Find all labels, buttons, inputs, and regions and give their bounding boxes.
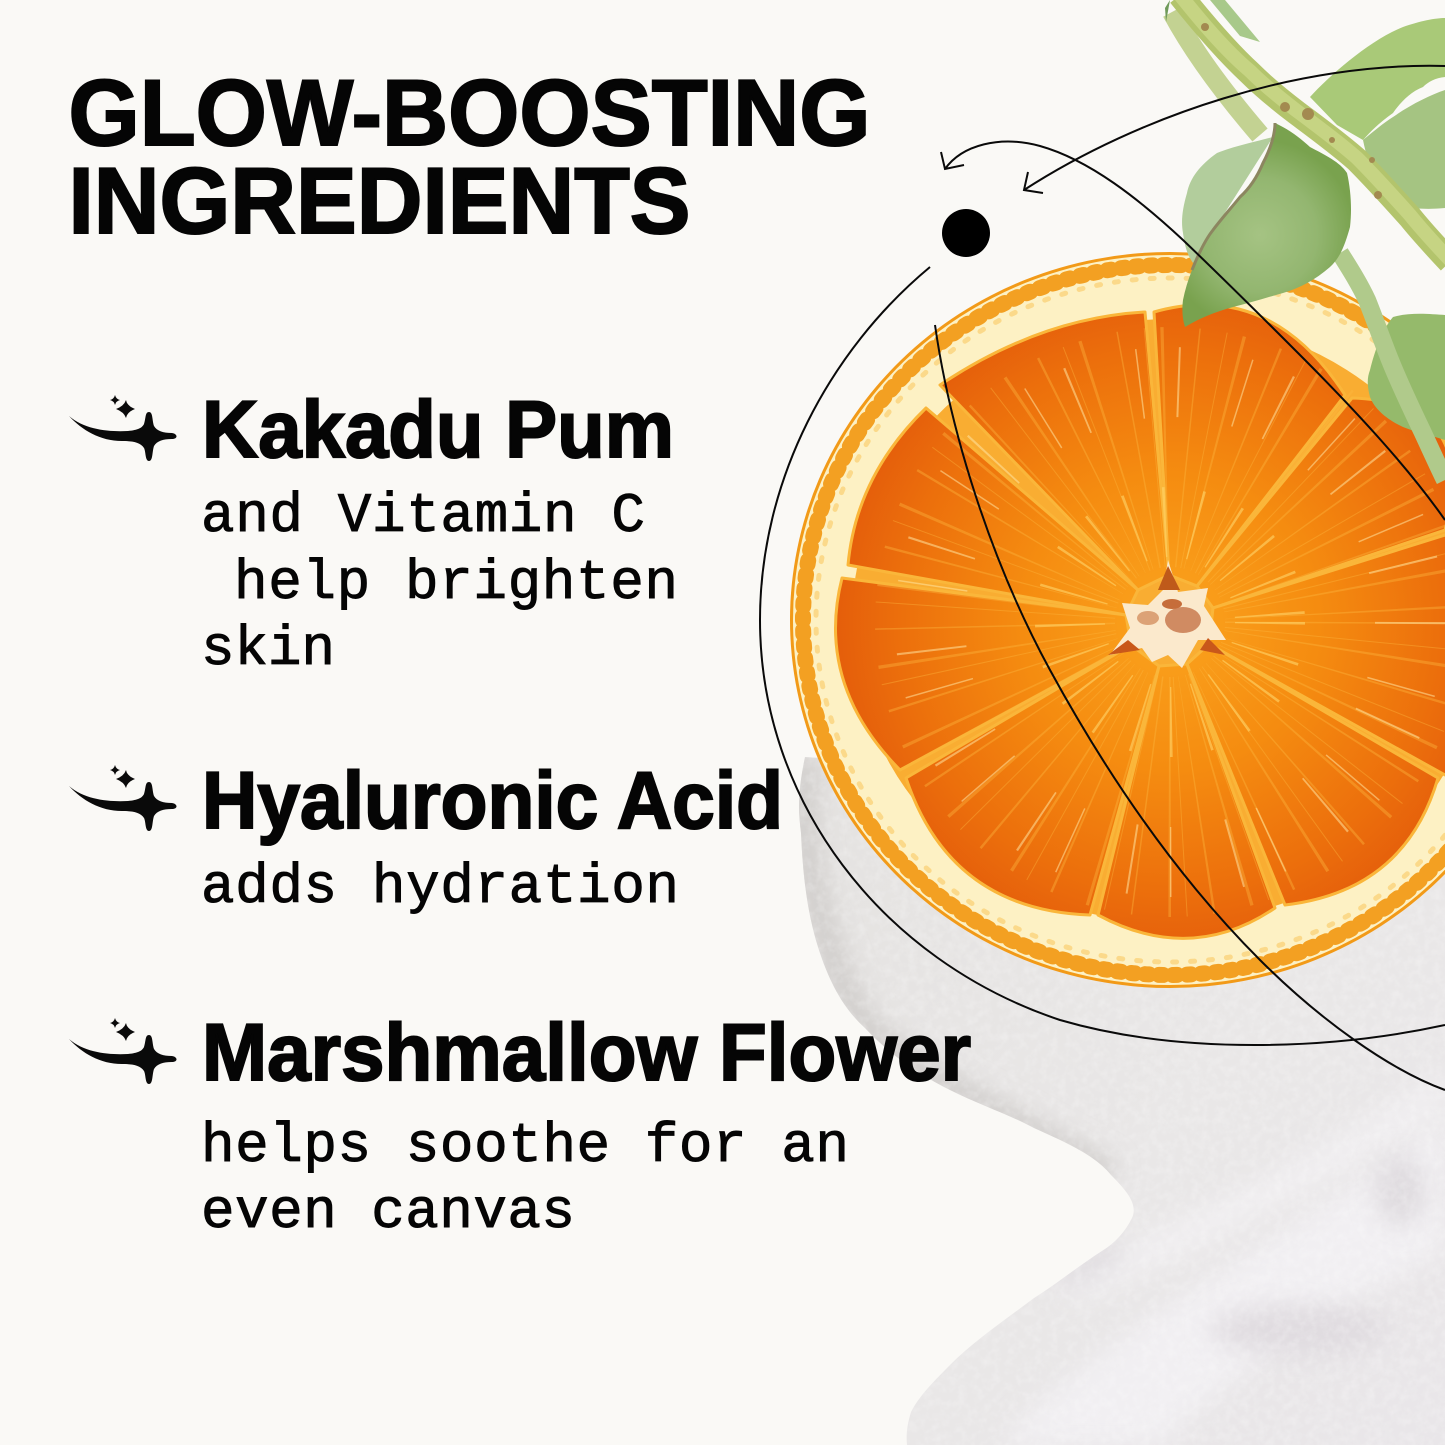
main stem [1180,0,1445,262]
right pod [1363,90,1445,209]
ingredient description: and Vitamin C [201,484,645,548]
orbit arrow to dot from above [941,142,1445,520]
ingredient name: Kakadu Pum [202,385,674,475]
pith shading [816,278,1445,962]
ingredient: Marshmallow Flower [69,1008,971,1244]
icon: sparkle star [69,395,176,461]
ingredient: Kakadu Plum [69,385,678,681]
ingredient description [201,484,678,681]
orbit circle line [760,267,1445,1045]
icon: sparkle star [69,1018,176,1084]
top right leaf [1310,18,1445,140]
lower stem [1340,253,1445,480]
orange segments [835,305,1445,938]
ingredient name: Hyaluronic Acid [202,756,783,846]
ingredient description: even canvas [201,1180,575,1244]
title: GLOW-BOOSTING [68,60,870,165]
stem highlight [1180,0,1445,260]
green plant sprig [1165,0,1445,480]
orange slice [790,252,1445,988]
black dot [942,209,990,257]
orbit descending line [935,325,1445,1090]
ingredient description: help brighten [234,551,678,615]
ingredient: Hyaluronic Acid [69,756,783,919]
juice fibres [930,382,1410,862]
ingredient name: Marshmallow Flower [202,1008,971,1098]
ingredient description: adds hydration [201,855,679,919]
rind pores [803,265,1445,975]
pod ridge [1192,123,1275,270]
orange rind [790,252,1445,988]
icon: sparkle star [69,765,176,831]
orbit arrow to dot from right [1024,66,1445,193]
title [68,60,870,253]
back branch [1172,12,1260,135]
orange core [1108,560,1226,668]
white pith [793,255,1445,985]
ingredient description [201,1114,849,1244]
lower right pod [1368,314,1445,440]
back pod [1182,137,1273,263]
title: INGREDIENTS [68,148,690,253]
flesh base [852,319,1445,923]
small leaf [1210,0,1260,42]
foam swoosh [799,750,1445,1445]
ingredient description: helps soothe for an [201,1114,849,1178]
stem nodes [1201,23,1382,199]
ingredient description: skin [201,617,335,681]
front pod [1182,123,1351,327]
